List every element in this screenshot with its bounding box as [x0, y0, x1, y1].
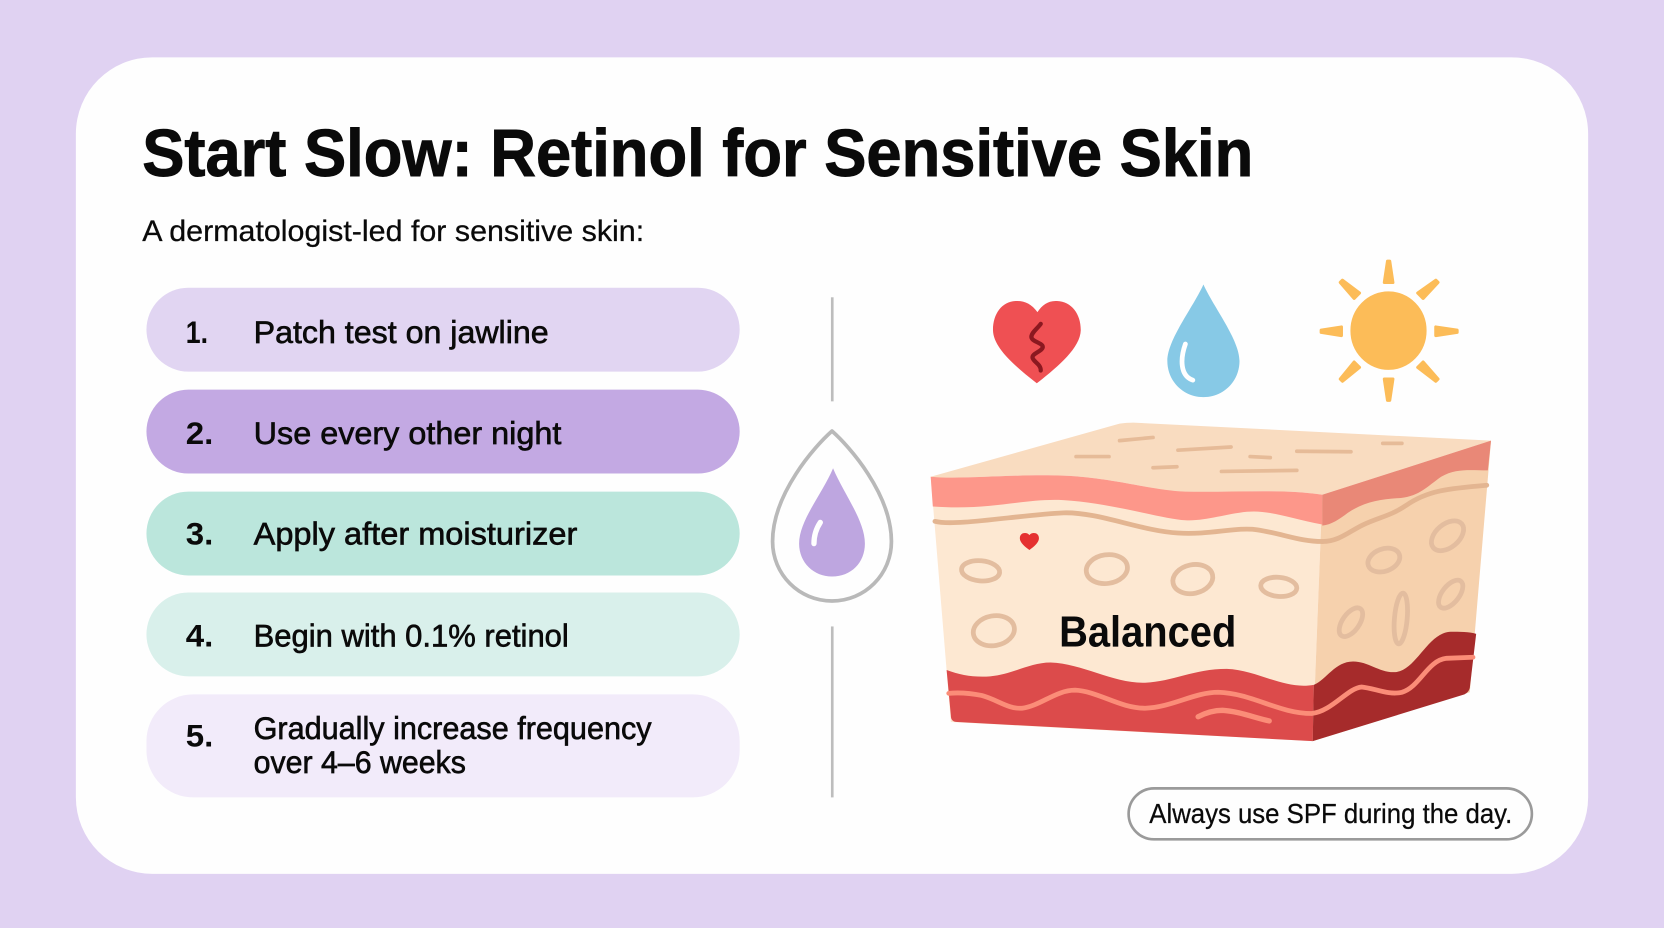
- title: Start Slow: Retinol for Sensitive Skin: [142, 116, 1253, 191]
- epidermis band front: [931, 475, 1322, 525]
- step 2: [146, 390, 740, 474]
- step 1: 1.: [186, 314, 208, 350]
- top surface: [931, 423, 1491, 495]
- label: Balanced: Balanced: [1059, 609, 1236, 657]
- illustration: skin cross-section block: [931, 423, 1491, 741]
- tan layer lines: [935, 485, 1487, 542]
- surface texture marks: [1076, 437, 1402, 471]
- dermis band front: [947, 663, 1314, 741]
- icon: retinol drop in outline: [773, 431, 891, 601]
- right face: [1313, 441, 1491, 741]
- step 4: [146, 592, 740, 676]
- subtitle: A dermatologist-led for sensitive skin:: [142, 215, 644, 248]
- icon: broken heart: [993, 301, 1081, 383]
- step 3: 3.: [186, 516, 213, 552]
- step 5: over 4–6 weeks: [254, 744, 466, 780]
- panel: numbered steps: [146, 288, 740, 797]
- step 2: 2.: [186, 415, 213, 451]
- step 2: Use every other night: [254, 415, 562, 451]
- step 5: Gradually increase frequency: [254, 710, 652, 746]
- step 4: Begin with 0.1% retinol: [254, 618, 569, 654]
- skin cells: [961, 515, 1469, 649]
- step 1: [146, 288, 740, 372]
- step 3: [146, 492, 740, 575]
- callout: SPF reminder: Always use SPF during the day.: [1149, 798, 1512, 829]
- step 4: 4.: [186, 618, 213, 654]
- callout: SPF reminder: [1129, 788, 1532, 839]
- epidermis band side: [1322, 441, 1491, 526]
- icon: sun: [1321, 261, 1457, 400]
- small heart: [1020, 533, 1039, 550]
- step 5: [146, 694, 740, 797]
- front face: [931, 477, 1322, 741]
- step 1: Patch test on jawline: [254, 314, 549, 350]
- step 3: Apply after moisturizer: [254, 516, 578, 552]
- blood vessel lines: [949, 657, 1473, 721]
- panel: main white card: [76, 57, 1588, 874]
- step 5: 5.: [186, 717, 213, 753]
- dermis band side: [1313, 632, 1476, 741]
- icon: water drop: [1167, 285, 1240, 397]
